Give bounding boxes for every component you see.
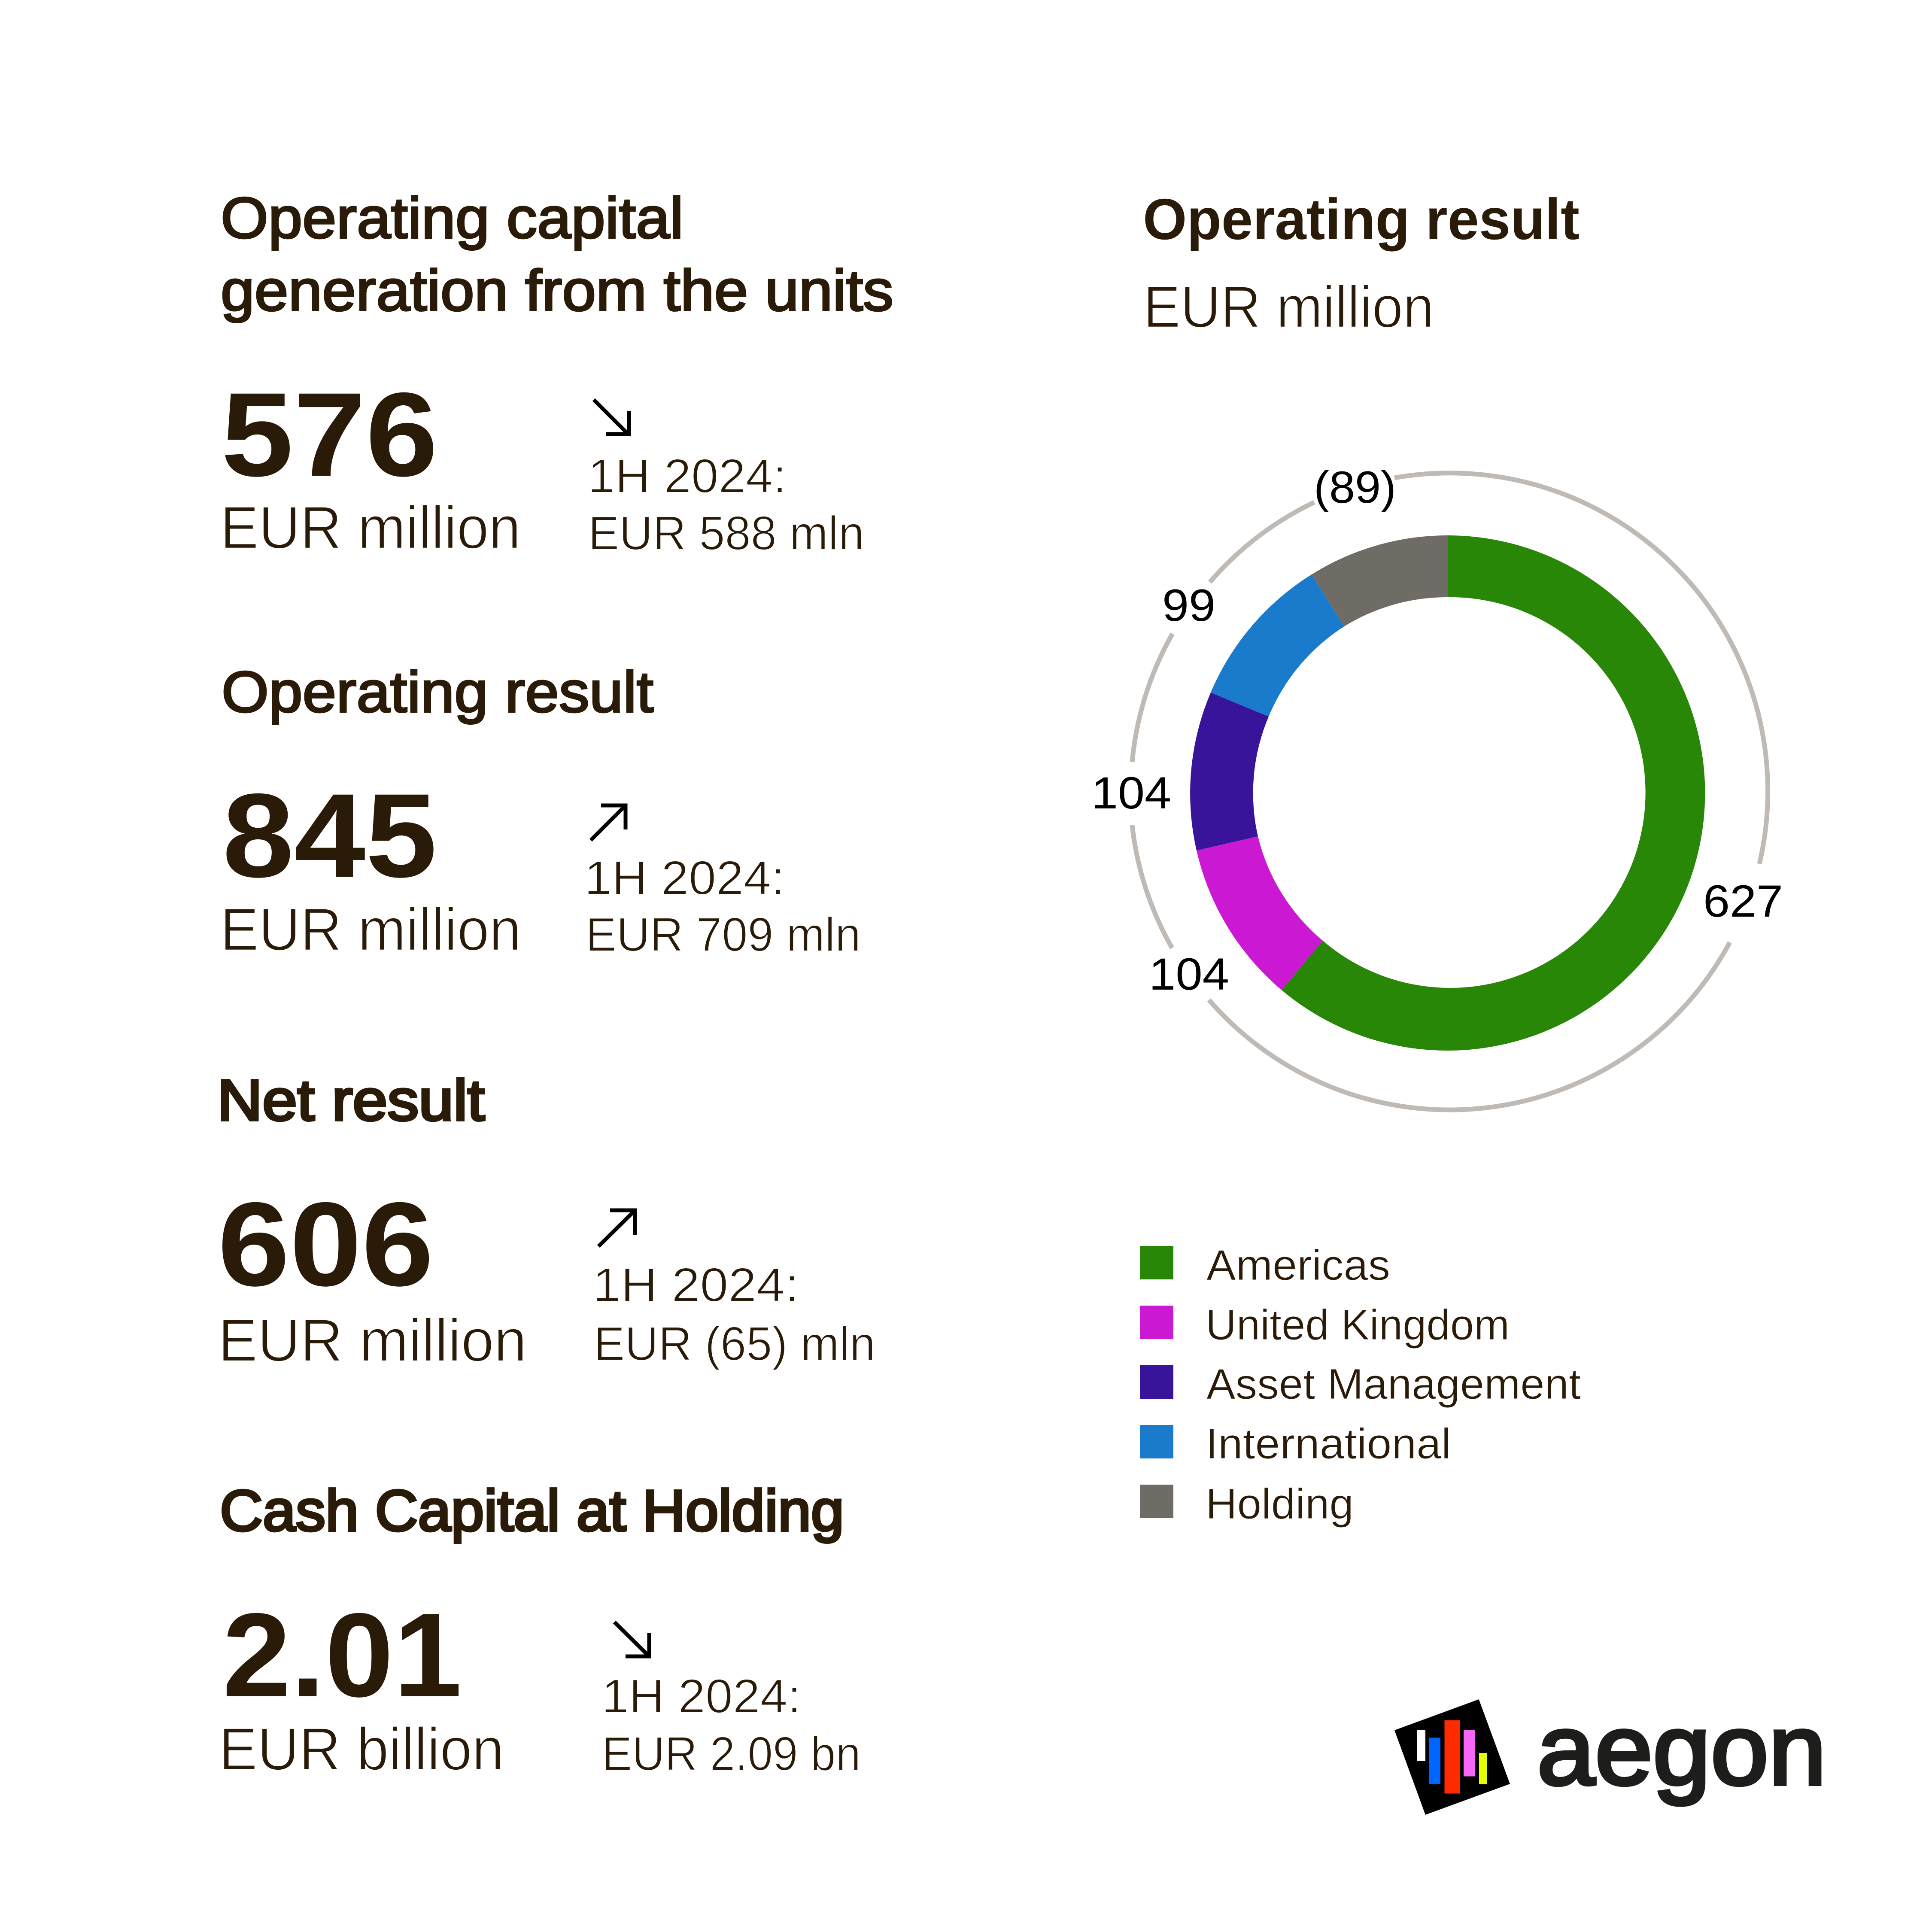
heading: operating capital generation: generation from the units — [221, 258, 893, 323]
segment: Americas 627 — [1282, 535, 1705, 1051]
segment: United Kingdom 104 — [1197, 836, 1323, 990]
comparison: 1H 2024 EUR 588 mln — [588, 450, 864, 560]
comparison: 1H 2024 EUR 588 mln: EUR 588 mln — [588, 507, 864, 560]
comparison: 1H 2024 EUR 2.09 bn: 1H 2024: — [601, 1670, 801, 1723]
panel: operating result — [220, 659, 861, 963]
comparison: 1H 2024 EUR 2.09 bn — [601, 1670, 861, 1780]
data labels: 104 — [1149, 949, 1229, 999]
segment: Holding (89) — [1312, 535, 1448, 626]
value: 606: 606 — [218, 1177, 434, 1311]
legend — [1140, 1241, 1581, 1528]
segment: International 99 — [1211, 574, 1344, 717]
heading: operating result: Operating result — [222, 659, 653, 724]
heading: cash capital at holding: Cash Capital at Holding — [220, 1478, 844, 1543]
legend item: International: International — [1206, 1420, 1451, 1468]
panel: net result — [217, 1068, 875, 1374]
icon: arrow up-right — [591, 805, 626, 840]
comparison: 1H 2024 EUR 588 mln: 1H 2024: — [588, 450, 787, 503]
comparison: 1H 2024 EUR 709 mln: EUR 709 mln — [586, 908, 861, 961]
data labels: (89) — [1314, 462, 1396, 513]
comparison: 1H 2024 EUR (65) mln: EUR (65) mln — [594, 1317, 875, 1370]
wordmark: aegon — [1537, 1693, 1826, 1806]
value: 845: 845 — [222, 769, 437, 902]
icon: arrow up-right — [598, 1210, 635, 1246]
legend item: Holding: Holding — [1206, 1480, 1354, 1528]
legend item: Asset Management: Asset Management — [1206, 1360, 1581, 1408]
legend item: United Kingdom: United Kingdom — [1206, 1301, 1510, 1349]
comparison: 1H 2024 EUR 709 mln — [584, 851, 861, 961]
comparison: 1H 2024 EUR (65) mln — [592, 1258, 875, 1370]
comparison: 1H 2024 EUR (65) mln: 1H 2024: — [592, 1258, 799, 1312]
subheading: EUR million: EUR million — [1143, 274, 1434, 340]
value: 2.01: 2.01 — [222, 1588, 462, 1722]
heading: operating capital generation: Operating capital — [221, 185, 683, 250]
data labels — [1091, 462, 1783, 999]
outer ring arcs — [1132, 473, 1768, 1110]
data labels: 627 — [1703, 876, 1783, 927]
icon: arrow down-right — [594, 400, 629, 434]
panel: operating capital generation — [220, 185, 893, 561]
legend item: Americas: Americas — [1206, 1241, 1390, 1289]
unit: EUR million: EUR million — [218, 1306, 527, 1374]
logo: aegon — [1394, 1693, 1826, 1815]
heading: operating result: Operating result — [1143, 187, 1580, 252]
data labels: 104 — [1091, 768, 1171, 818]
heading: operating capital generation — [221, 185, 893, 323]
icon: arrow down-right — [614, 1622, 649, 1656]
unit: EUR billion: EUR billion — [219, 1715, 504, 1783]
heading: net result: Net result — [217, 1068, 485, 1133]
unit: EUR million: EUR million — [220, 494, 521, 561]
panel: cash capital at holding — [219, 1478, 861, 1783]
donut chart — [1190, 535, 1705, 1051]
icon: aegon mark — [1394, 1699, 1510, 1815]
legend item: Holding — [1140, 1480, 1354, 1528]
panel: operating result donut — [1091, 187, 1783, 1110]
comparison: 1H 2024 EUR 2.09 bn: EUR 2.09 bn — [602, 1727, 861, 1780]
value: 576: 576 — [221, 368, 438, 501]
unit: EUR million: EUR million — [220, 896, 521, 963]
segment: Asset Management 104 — [1190, 693, 1269, 851]
data labels: 99 — [1162, 580, 1215, 631]
comparison: 1H 2024 EUR 709 mln: 1H 2024: — [584, 851, 785, 905]
